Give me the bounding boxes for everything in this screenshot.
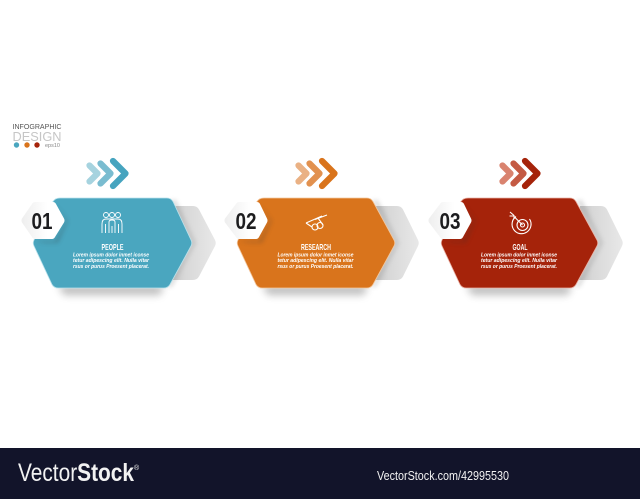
heading: goal: GOAL <box>512 242 528 252</box>
footer url: VectorStock.com/42995530 <box>377 468 509 483</box>
number: 01 <box>32 208 53 234</box>
footer logo: VectorStock <box>18 459 134 487</box>
panel: goal <box>428 161 623 295</box>
body text <box>73 252 150 270</box>
body text: rsus or purus Proesent placerat. <box>73 264 149 270</box>
body text <box>278 252 354 270</box>
heading: research: RESEARCH <box>301 242 331 252</box>
number: 03 <box>440 208 460 234</box>
logo design word: DESIGN <box>12 130 61 144</box>
panel shadow <box>466 285 572 295</box>
icon: target <box>510 212 531 234</box>
gray back hexagon <box>573 206 623 280</box>
body text: tetur adipescing elit. Nulla vitar <box>73 258 150 264</box>
number hexagon shadow <box>34 204 68 243</box>
panel shadow <box>58 285 164 295</box>
number hexagon <box>224 202 268 239</box>
body text: Lorem ipsum dolor inmet iconse <box>481 252 557 258</box>
gray back hexagon <box>369 206 419 280</box>
body text: rsus or purus Proesent placerat. <box>481 264 557 270</box>
number hexagon shadow <box>442 204 476 243</box>
logo eps label: eps10 <box>45 143 60 149</box>
body text: rsus or purus Proesent placerat. <box>278 264 354 270</box>
icon: people <box>102 212 122 233</box>
number: 02 <box>236 208 256 234</box>
red hexagon <box>441 198 598 288</box>
panel shadow <box>262 285 368 295</box>
logo dots <box>14 142 40 148</box>
body text: tetur adipescing elit. Nulla vitar <box>481 258 558 264</box>
number hexagon <box>22 202 64 239</box>
heading: people: PEOPLE <box>102 242 124 252</box>
number hexagon shadow <box>238 204 272 243</box>
panel: research <box>224 161 419 295</box>
logo heading: INFOGRAPHIC <box>12 122 62 131</box>
arrows: orange chevrons <box>298 161 334 186</box>
logo: infographic design <box>12 122 62 149</box>
orange hexagon <box>237 198 395 288</box>
body text: tetur adipescing elit. Nulla vitar <box>278 258 354 264</box>
icon: research glasses <box>306 215 327 230</box>
number hexagon <box>428 202 472 239</box>
teal hexagon <box>33 198 192 288</box>
arrows: teal chevrons <box>90 161 126 186</box>
body text <box>481 252 558 270</box>
body text: Lorem ipsum dolor inmet iconse <box>278 252 354 258</box>
gray back hexagon <box>165 206 216 280</box>
panel: people <box>22 161 216 295</box>
footer bar <box>0 448 640 499</box>
arrows: red chevrons <box>502 161 538 186</box>
registered mark: ® <box>134 464 140 472</box>
body text: Lorem ipsum dolor inmet iconse <box>73 252 149 258</box>
